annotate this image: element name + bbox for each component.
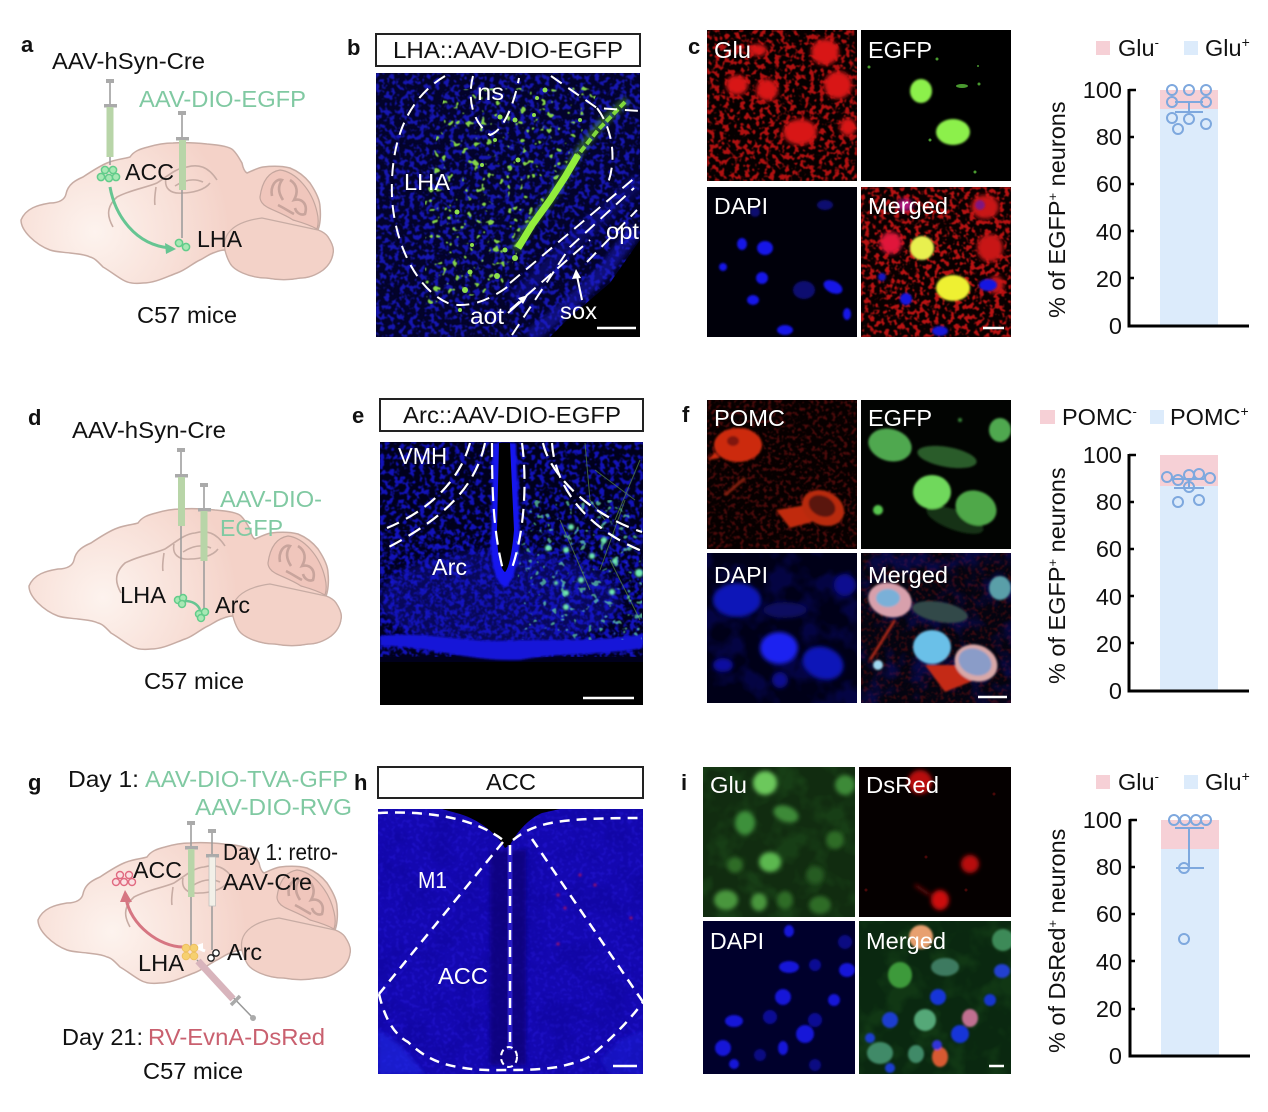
label: LHA xyxy=(120,582,166,608)
axes xyxy=(1129,454,1249,691)
label: ACC xyxy=(133,857,182,883)
panel d: schematic xyxy=(29,417,341,694)
bar xyxy=(1160,455,1218,691)
labels e: VMH xyxy=(398,443,447,469)
midline band xyxy=(490,850,526,1065)
arrow ACC to LHA xyxy=(110,187,176,254)
ACC neurons xyxy=(97,166,120,182)
micrograph i: DsRed xyxy=(859,767,1011,917)
legend: - xyxy=(1155,35,1159,50)
micrograph f: Merged: Merged xyxy=(868,562,948,588)
y axis label: % of EGFP xyxy=(1044,200,1070,318)
micrograph c: EGFP xyxy=(861,30,1011,181)
micrograph h xyxy=(378,809,643,1074)
label: Day 21: xyxy=(62,1024,143,1050)
legend xyxy=(1096,768,1250,795)
legend: Glu xyxy=(1118,35,1155,61)
tick labels: 40 xyxy=(1096,949,1122,975)
tick labels: 20 xyxy=(1096,996,1122,1022)
title box h: ACC xyxy=(486,769,536,795)
micrograph f: DAPI: DAPI xyxy=(714,562,768,588)
micrograph c: Merged: Merged xyxy=(868,193,948,219)
label: LHA xyxy=(138,950,184,976)
label: AAV-DIO-EGFP xyxy=(139,86,306,112)
label: ACC xyxy=(125,159,174,185)
labels h xyxy=(418,867,488,989)
tick labels: 0 xyxy=(1109,313,1122,339)
labels b: opt xyxy=(606,218,639,244)
y axis label: + xyxy=(1045,193,1060,200)
panel a: schematic xyxy=(21,48,333,328)
micrograph i: DAPI xyxy=(703,921,855,1074)
labels b xyxy=(404,79,639,329)
micrograph f: POMC: POMC xyxy=(714,405,785,431)
bar xyxy=(1160,90,1218,326)
tick labels xyxy=(1083,442,1122,704)
micrograph c: DAPI xyxy=(707,187,857,337)
labels h: M1 xyxy=(418,867,447,893)
neurons and arrow xyxy=(174,594,208,622)
chart c xyxy=(1044,34,1250,339)
chart i xyxy=(1044,768,1250,1069)
axes xyxy=(1129,89,1249,326)
label: Day 1: retro- xyxy=(223,839,338,865)
ACC neurons red xyxy=(112,872,136,886)
y axis label: + xyxy=(1045,559,1060,566)
label: RV-EvnA-DsRed xyxy=(148,1024,325,1050)
label: Day 1: xyxy=(68,766,139,792)
y axis label: % of DsRed xyxy=(1044,928,1070,1053)
labels e: Arc xyxy=(432,554,467,580)
label: AAV-hSyn-Cre xyxy=(52,48,205,74)
micrograph b xyxy=(376,73,640,337)
tick labels: 100 xyxy=(1083,77,1122,103)
panel letter e: e xyxy=(352,403,364,428)
panel letter h: h xyxy=(354,770,367,795)
micrograph f: EGFP xyxy=(861,400,1011,549)
micrograph c: Merged xyxy=(861,187,1011,337)
micrograph i: DAPI: DAPI xyxy=(710,928,764,954)
legend: Glu xyxy=(1118,769,1155,795)
syringe pink diagonal xyxy=(197,960,256,1021)
syringe white xyxy=(206,829,219,950)
label: Arc xyxy=(227,939,262,965)
Arc neurons xyxy=(208,950,219,961)
legend: - xyxy=(1155,769,1159,784)
labels e xyxy=(398,443,467,580)
panel letter f: f xyxy=(682,402,690,427)
legend: + xyxy=(1240,403,1249,419)
data points xyxy=(1169,815,1211,944)
syringe 1 xyxy=(175,448,188,597)
tick labels: 20 xyxy=(1096,266,1122,292)
micrograph c: DAPI: DAPI xyxy=(714,193,768,219)
ventricle xyxy=(491,443,520,587)
panel letter d: d xyxy=(28,405,41,430)
micrograph f: EGFP: EGFP xyxy=(868,405,932,431)
y axis label: % of EGFP xyxy=(1044,566,1070,684)
legend xyxy=(1096,34,1250,61)
y axis label: neurons xyxy=(1044,467,1070,559)
micrograph i: DsRed: DsRed xyxy=(866,772,939,798)
labels b: sox xyxy=(560,298,597,324)
legend: POMC xyxy=(1062,404,1132,430)
title box e xyxy=(380,399,643,431)
micrograph i: Glu: Glu xyxy=(710,772,747,798)
label: AAV-DIO-TVA-GFP xyxy=(145,766,348,792)
panel letter a: a xyxy=(21,32,34,57)
tick labels: 40 xyxy=(1096,584,1122,610)
tick labels: 60 xyxy=(1096,901,1122,927)
legend: Glu xyxy=(1205,769,1242,795)
chart f xyxy=(1040,403,1249,704)
label: C57 mice xyxy=(143,1058,243,1084)
data points xyxy=(1162,469,1215,507)
panel letter b: b xyxy=(347,35,360,60)
micrograph f: POMC xyxy=(707,400,857,549)
label: EGFP xyxy=(220,515,283,541)
legend: POMC xyxy=(1170,404,1240,430)
y axis label: neurons xyxy=(1044,829,1070,920)
tick labels: 60 xyxy=(1096,171,1122,197)
labels h: ACC xyxy=(438,963,488,989)
tick labels xyxy=(1083,807,1122,1069)
syringe: AAV-DIO-EGFP xyxy=(176,111,189,238)
axes xyxy=(1130,819,1250,1056)
legend: - xyxy=(1132,404,1137,419)
label: AAV-DIO- xyxy=(220,486,322,512)
label: AAV-hSyn-Cre xyxy=(72,417,226,443)
tick labels: 100 xyxy=(1083,807,1122,833)
title box e: Arc::AAV-DIO-EGFP xyxy=(403,402,621,428)
arrows and scale bar b xyxy=(508,269,636,328)
label: LHA xyxy=(197,226,242,252)
y axis label: + xyxy=(1045,920,1060,928)
arrows xyxy=(120,890,205,952)
tick labels xyxy=(1083,77,1122,339)
micrograph i: Merged xyxy=(859,921,1011,1074)
legend: + xyxy=(1242,34,1250,50)
label: AAV-DIO-RVG xyxy=(195,794,352,820)
syringe 2 xyxy=(198,483,211,612)
micrograph e xyxy=(380,442,643,705)
fibres and cells xyxy=(515,443,643,640)
micrograph f: Merged xyxy=(861,553,1011,703)
tick labels: 40 xyxy=(1096,219,1122,245)
legend xyxy=(1040,403,1249,430)
tick labels: 80 xyxy=(1096,124,1122,150)
micrograph c: EGFP: EGFP xyxy=(868,37,932,63)
tick labels: 80 xyxy=(1096,489,1122,515)
bar xyxy=(1161,820,1219,1056)
label: C57 mice xyxy=(137,302,237,328)
label: AAV-Cre xyxy=(223,869,312,895)
micrograph i: Merged: Merged xyxy=(866,928,946,954)
legend: Glu xyxy=(1205,35,1242,61)
LHA neurons xyxy=(175,239,190,251)
syringe: AAV-hSyn-Cre xyxy=(104,79,117,165)
LHA neurons yellow xyxy=(182,944,198,960)
title box h xyxy=(378,767,643,798)
labels b: aot xyxy=(470,303,504,329)
title box b: LHA::AAV-DIO-EGFP xyxy=(393,37,623,63)
micrograph f: DAPI xyxy=(707,553,857,703)
tick labels: 60 xyxy=(1096,536,1122,562)
tick labels: 0 xyxy=(1109,1043,1122,1069)
legend: + xyxy=(1242,768,1250,784)
tick labels: 100 xyxy=(1083,442,1122,468)
title box b xyxy=(376,34,640,66)
panel letter i: i xyxy=(681,770,687,795)
micrograph i: Glu xyxy=(703,767,855,917)
label: C57 mice xyxy=(144,668,244,694)
panel letter g: g xyxy=(28,770,41,795)
tick labels: 20 xyxy=(1096,631,1122,657)
y axis label: neurons xyxy=(1044,101,1070,193)
micrograph c: Glu: Glu xyxy=(714,37,751,63)
panel letter c: c xyxy=(688,34,700,59)
syringe green xyxy=(185,821,198,948)
panel g: schematic xyxy=(38,766,352,1084)
labels b: ns xyxy=(477,79,504,105)
tick labels: 80 xyxy=(1096,854,1122,880)
label: Arc xyxy=(215,592,250,618)
micrograph c: Glu xyxy=(707,30,857,181)
labels b: LHA xyxy=(404,169,450,195)
tick labels: 0 xyxy=(1109,678,1122,704)
green projection streak xyxy=(515,100,627,250)
data points xyxy=(1167,85,1211,134)
